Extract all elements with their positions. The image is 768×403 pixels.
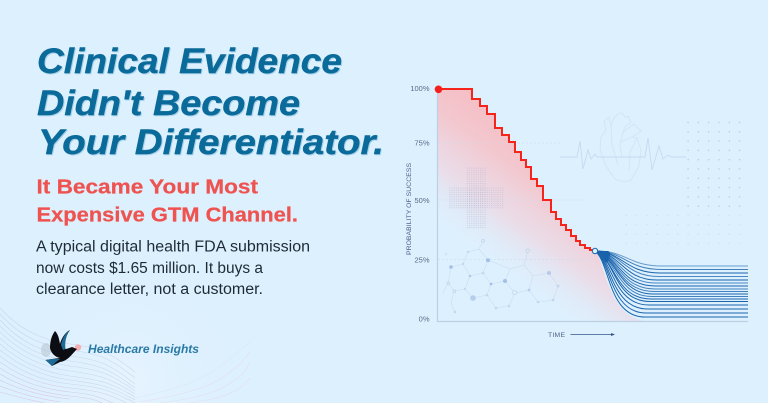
y axis tick labels: 75% <box>414 138 430 148</box>
molecule network <box>443 239 560 313</box>
red survival step curve <box>438 89 595 250</box>
y axis tick labels: 0% <box>419 314 430 324</box>
subtitle <box>36 176 298 227</box>
y axis tick labels: 100% <box>410 84 430 93</box>
logo <box>41 330 199 366</box>
subtitle: Expensive GTM Channel. <box>36 204 298 227</box>
title: Clinical Evidence <box>37 42 342 81</box>
y axis tick labels: 50% <box>414 196 430 205</box>
x axis label with arrow: TIME <box>548 332 565 339</box>
chart: probability of success over time <box>406 84 748 339</box>
y axis title: PROBABILITY OF SUCCESS <box>406 163 413 255</box>
title <box>37 42 384 162</box>
body text: A typical digital health FDA submission <box>36 238 310 256</box>
blue outcome curves <box>595 251 748 317</box>
y axis tick labels <box>410 84 430 324</box>
y axis tick labels: 25% <box>414 256 430 264</box>
end point marker <box>592 248 598 254</box>
subtitle: It Became Your Most <box>36 176 258 198</box>
x axis label with arrow <box>548 332 615 339</box>
brand name: Healthcare Insights <box>88 342 199 356</box>
body text: clearance letter, not a customer. <box>36 281 263 298</box>
background glow <box>0 255 255 403</box>
ECG trace <box>560 138 686 170</box>
icon: dotted plus <box>449 167 504 229</box>
dot grid <box>625 120 744 246</box>
body text: now costs $1.65 million. It buys a <box>36 260 263 277</box>
icon: bird <box>41 330 81 366</box>
body text <box>36 238 310 298</box>
red area under curve <box>438 89 645 321</box>
grid lines <box>438 143 595 260</box>
axes <box>438 89 748 322</box>
start point marker <box>435 86 442 93</box>
title: Your Differentiator. <box>38 123 384 162</box>
title: Didn't Become <box>37 84 300 123</box>
decorative wave lines <box>0 308 250 403</box>
icon: heart outline <box>600 113 641 182</box>
